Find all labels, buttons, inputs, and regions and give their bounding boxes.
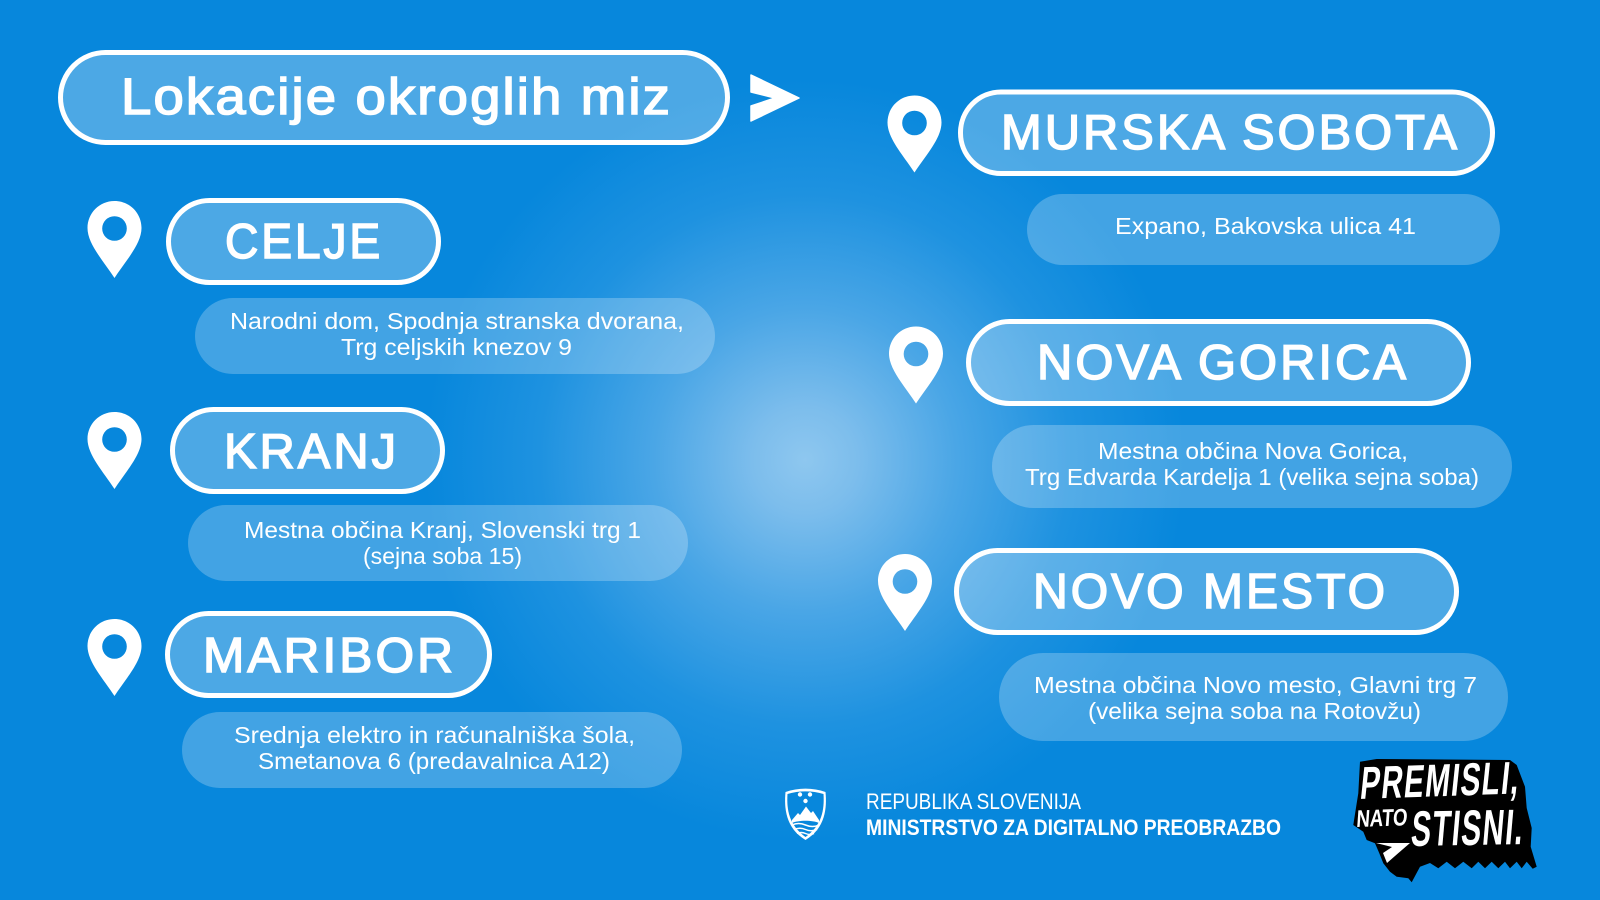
address: Maribor: Smetanova 6 (predavalnica A12) — [258, 748, 610, 774]
heading: Kranj: KRANJ — [224, 425, 399, 479]
icon: Slovenian coat of arms — [785, 789, 826, 840]
heading: Celje — [168, 200, 438, 282]
address: Nova Gorica: Mestna občina Nova Gorica, — [1098, 438, 1408, 464]
panel: Maribor — [88, 614, 682, 788]
heading: Murska Sobota: MURSKA SOBOTA — [1001, 106, 1460, 160]
ministry text: REPUBLIKA SLOVENIJA — [866, 789, 1081, 814]
panel: Murska Sobota — [888, 92, 1500, 265]
heading: Murska Sobota — [960, 92, 1492, 174]
address: Murska Sobota: Expano, Bakovska ulica 41 — [1115, 213, 1416, 239]
heading: Nova Gorica: NOVA GORICA — [1037, 336, 1409, 390]
icon: pin Kranj — [88, 412, 142, 489]
icon: pin Maribor — [88, 619, 142, 696]
icon: pin Murska Sobota — [888, 96, 942, 172]
address: Nova Gorica: Trg Edvarda Kardelja 1 (velika sejna soba) — [1025, 464, 1479, 490]
heading: Novo mesto — [956, 550, 1456, 632]
address: Celje: Trg celjskih knezov 9 — [341, 334, 572, 360]
address: Novo mesto: (velika sejna soba na Rotovžu) — [1088, 698, 1421, 724]
panel: Kranj — [88, 410, 688, 581]
icon: pin Nova Gorica — [889, 326, 943, 404]
ministry text: MINISTRSTVO ZA DIGITALNO PREOBRAZBO — [866, 815, 1281, 840]
address: Novo mesto: Mestna občina Novo mesto, Glavni trg 7 — [1034, 672, 1477, 698]
heading: Novo mesto: NOVO MESTO — [1033, 565, 1388, 619]
heading: Nova Gorica — [968, 322, 1468, 404]
address: Novo mesto — [999, 653, 1508, 741]
address: Kranj: (sejna soba 15) — [363, 543, 522, 569]
icon: pin Novo mesto — [878, 554, 932, 631]
logo: Premisli, nato stisni: NATO — [1356, 804, 1408, 833]
panel: Novo mesto — [878, 550, 1508, 741]
icon: arrow — [751, 75, 799, 121]
address: Maribor: Srednja elektro in računalniška šola, — [234, 722, 635, 748]
ministry text — [866, 789, 1281, 840]
address: Kranj: Mestna občina Kranj, Slovenski trg 1 — [244, 517, 641, 543]
panel: Celje — [88, 200, 715, 374]
address: Celje — [195, 298, 715, 374]
logo: Premisli, nato stisni: STISNI. — [1409, 799, 1527, 857]
heading: Celje: CELJE — [225, 215, 383, 269]
heading: Kranj — [172, 410, 442, 492]
title — [60, 52, 728, 142]
heading: Maribor — [168, 614, 490, 696]
address: Maribor — [182, 712, 682, 788]
address: Celje: Narodni dom, Spodnja stranska dvorana, — [230, 308, 684, 334]
title: Lokacije okroglih miz — [121, 68, 672, 125]
address: Kranj — [188, 505, 688, 581]
address: Nova Gorica — [992, 425, 1512, 508]
icon: pin Celje — [88, 201, 142, 278]
heading: Maribor: MARIBOR — [203, 629, 456, 683]
panel: Nova Gorica — [889, 322, 1512, 508]
address: Murska Sobota — [1027, 194, 1500, 265]
logo: Premisli, nato stisni — [1353, 751, 1537, 882]
